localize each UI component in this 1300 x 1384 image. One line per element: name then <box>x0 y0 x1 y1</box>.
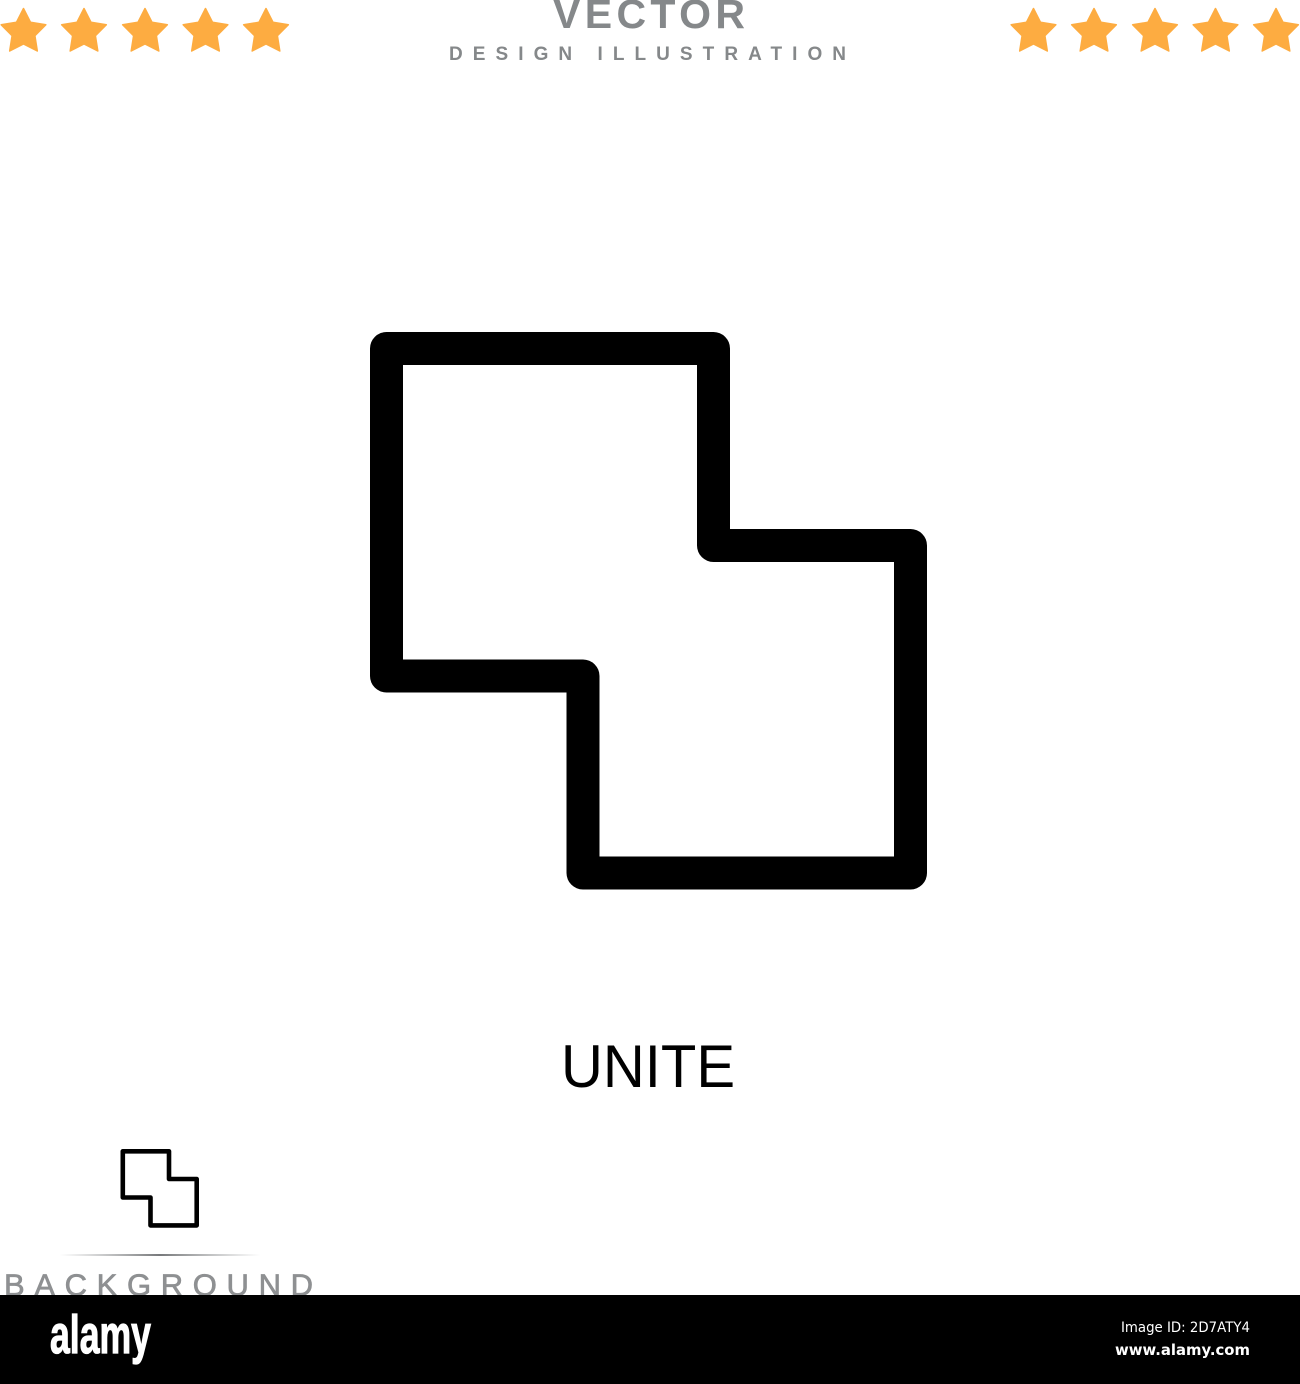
icon: small unite outline <box>123 1151 197 1225</box>
website address: www.alamy.com <box>1115 1341 1250 1359</box>
subheading: design illustration: DESIGN ILLUSTRATION <box>449 44 846 65</box>
footer logo: alamy: alamy <box>50 1305 151 1365</box>
footer bar <box>0 1295 1300 1384</box>
background label: BACKGROUND <box>4 1268 313 1302</box>
image id: Image ID: 2D7ATY4 <box>1121 1320 1250 1336</box>
icon: large unite outline <box>386 348 910 873</box>
right star rating <box>1011 8 1298 51</box>
divider line under small icon <box>60 1254 260 1256</box>
left star rating <box>1 8 288 51</box>
icon label: unite: UNITE <box>561 1033 735 1100</box>
